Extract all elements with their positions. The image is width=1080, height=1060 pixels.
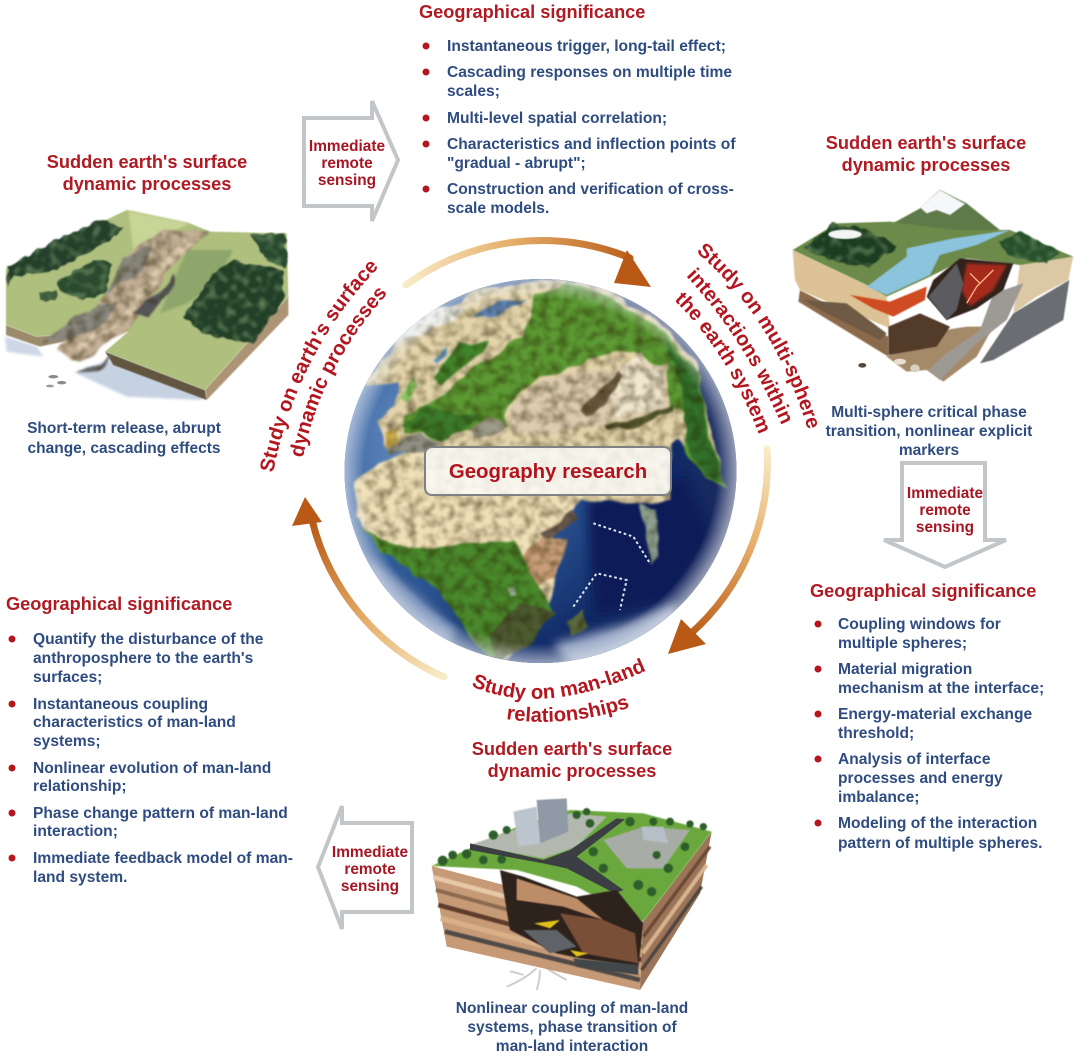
arrow: immediate remote sensing (down): remote xyxy=(919,502,971,519)
surface xyxy=(793,222,1073,297)
arrow: immediate remote sensing (right): sensing xyxy=(318,172,376,189)
bullet list: mechanism at the interface; xyxy=(838,680,1044,697)
bullet list: Characteristics and inflection points of xyxy=(447,136,736,153)
bullet list: interaction; xyxy=(33,823,118,840)
bullet list xyxy=(422,38,736,217)
bullet list: Analysis of interface xyxy=(838,751,991,768)
bullet list: multiple spheres; xyxy=(838,635,967,652)
panel: right process: dynamic processes xyxy=(842,155,1010,175)
panel: bottom process: systems, phase transition of xyxy=(467,1019,677,1036)
bullet list: Construction and verification of cross- xyxy=(447,181,734,198)
globe shading xyxy=(344,279,736,663)
bullet list: Energy-material exchange xyxy=(838,706,1032,723)
bullet list: Cascading responses on multiple time xyxy=(447,64,732,81)
arrow: immediate remote sensing (left): Immediate xyxy=(332,844,408,861)
bullet list: relationship; xyxy=(33,778,127,795)
bullet list: surfaces; xyxy=(33,669,102,686)
arrow: left arc xyxy=(292,497,444,677)
bullet list: Nonlinear evolution of man-land xyxy=(33,760,271,777)
arrow: immediate remote sensing (down) xyxy=(884,463,1006,567)
bullet list: Instantaneous trigger, long-tail effect; xyxy=(447,38,726,55)
panel: right process: markers xyxy=(899,442,959,459)
bullet list: processes and energy xyxy=(838,770,1003,787)
arrow: immediate remote sensing (left) xyxy=(318,806,412,929)
panel: top geographical significance xyxy=(419,2,736,217)
panel: left process: dynamic processes xyxy=(63,174,231,194)
cavity xyxy=(500,870,643,967)
bullet list: scales; xyxy=(447,83,500,100)
bullet list: Instantaneous coupling xyxy=(33,696,208,713)
bullet list: Phase change pattern of man-land xyxy=(33,805,288,822)
bullet list: imbalance; xyxy=(838,789,919,806)
bullet list: characteristics of man-land xyxy=(33,714,236,731)
heading: Sudden earth's surface xyxy=(472,739,672,759)
label: Geography research xyxy=(425,447,671,495)
roots xyxy=(507,968,567,990)
Black Sea and Mediterranean xyxy=(470,417,507,438)
ring label: multi-sphere interactions: interactions within xyxy=(687,267,790,424)
bullet list: Material migration xyxy=(838,661,972,678)
trees xyxy=(438,808,707,896)
ring label: earth's surface dynamic processes: Study on earth's surface xyxy=(260,262,377,472)
lake xyxy=(867,230,1010,295)
panel: right process: transition, nonlinear explicit xyxy=(826,423,1032,440)
arrow: immediate remote sensing (left): remote xyxy=(344,861,396,878)
bullet list: Multi-level spatial correlation; xyxy=(447,110,667,127)
bullet list xyxy=(8,631,293,886)
ring label: man-land relationships: Study on man-land xyxy=(472,658,646,702)
strata side xyxy=(640,832,712,990)
panel: left process xyxy=(5,152,288,457)
arrow: top arc xyxy=(406,240,651,287)
globe sphere xyxy=(344,279,736,663)
bullet list: scale models. xyxy=(447,200,549,217)
panel: bottom process xyxy=(432,739,712,1055)
arrow: immediate remote sensing (down): Immediate xyxy=(907,485,983,502)
bullet list: anthroposphere to the earth's xyxy=(33,650,254,667)
trees xyxy=(7,220,286,343)
panel: central globe xyxy=(344,277,736,670)
illustration: urban subsidence block xyxy=(432,798,712,990)
surface xyxy=(432,810,712,922)
heading: Geographical significance xyxy=(6,594,232,614)
Central Asia highlands xyxy=(510,360,670,437)
bullet list: threshold; xyxy=(838,725,914,742)
illustration: landslide block xyxy=(5,210,288,400)
bullet list xyxy=(814,616,1044,852)
bullet list: land system. xyxy=(33,869,127,886)
bullet list: systems; xyxy=(33,733,101,750)
arrow: immediate remote sensing (right): remote xyxy=(321,155,373,172)
ring label: earth's surface dynamic processes: dynamic processes xyxy=(290,288,386,456)
arrow: immediate remote sensing (right): Immediate xyxy=(309,138,385,155)
panel: left process: change, cascading effects xyxy=(28,440,220,457)
forest xyxy=(803,223,1060,267)
label: Geography research: Geography research xyxy=(449,461,647,483)
land: Eurasia xyxy=(363,277,720,503)
bullet list: Immediate feedback model of man- xyxy=(33,850,293,867)
ring label: man-land relationships: relationships xyxy=(507,698,628,722)
arrow: right arc xyxy=(668,449,767,654)
Indian Ocean islands xyxy=(593,523,650,563)
arrow: immediate remote sensing (down): sensing xyxy=(916,519,974,536)
arctic ice and lakes xyxy=(389,305,466,350)
ring label: man-land relationships xyxy=(472,658,646,722)
ring label: multi-sphere interactions: the earth system xyxy=(676,292,768,434)
fissure and lava xyxy=(927,258,1013,320)
bullet list: pattern of multiple spheres. xyxy=(838,835,1042,852)
heading: Geographical significance xyxy=(810,581,1036,601)
bullet list: Quantify the disturbance of the xyxy=(33,631,264,648)
caption: Nonlinear coupling of man-land xyxy=(456,1000,688,1017)
arrow: immediate remote sensing (left): sensing xyxy=(341,878,399,895)
land: Siberian forest xyxy=(403,280,728,490)
land: Africa and Arabia xyxy=(355,453,587,660)
panel: right geographical significance xyxy=(810,581,1044,852)
bullet list: Coupling windows for xyxy=(838,616,1001,633)
caption: Short-term release, abrupt xyxy=(27,420,221,437)
panel: right process xyxy=(793,133,1073,459)
ring label: multi-sphere interactions: Study on multi-sphere xyxy=(698,244,817,428)
panel: bottom process: man-land interaction xyxy=(496,1038,648,1055)
caption: Multi-sphere critical phase xyxy=(831,404,1027,421)
strata front xyxy=(432,866,643,990)
dark Indian Ocean xyxy=(587,477,713,617)
heading: Sudden earth's surface xyxy=(47,152,247,172)
panel: left geographical significance xyxy=(6,594,293,886)
roads xyxy=(470,818,625,893)
heading: Geographical significance xyxy=(419,2,645,22)
bullet list: "gradual - abrupt"; xyxy=(447,155,586,172)
heading: Sudden earth's surface xyxy=(826,133,1026,153)
buildings xyxy=(537,798,568,843)
debris flow xyxy=(40,230,210,375)
illustration: earthquake and volcano block xyxy=(793,190,1073,382)
panel: bottom process: dynamic processes xyxy=(488,761,656,781)
arrow: immediate remote sensing (right) xyxy=(304,101,398,221)
bullet list: Modeling of the interaction xyxy=(838,815,1037,832)
